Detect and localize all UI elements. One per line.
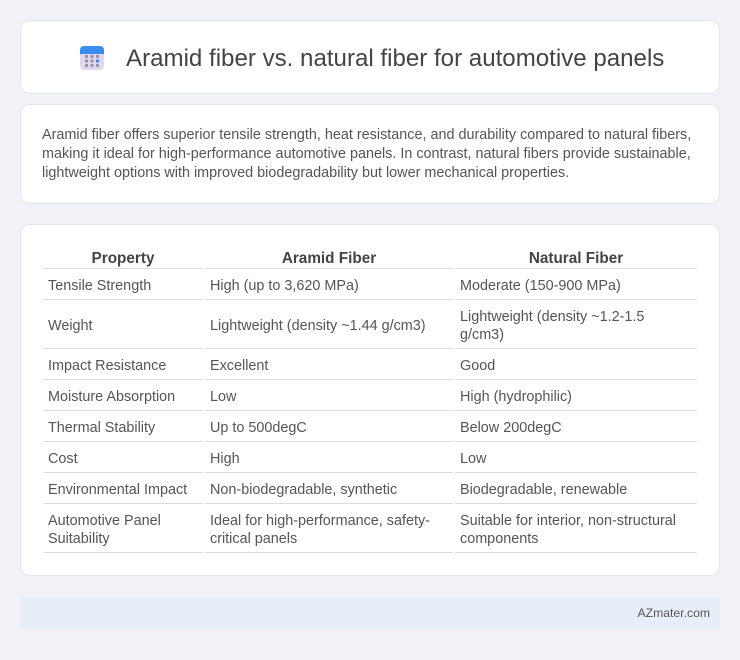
comparison table: components [460, 531, 538, 547]
comparison table: Biodegradable, renewable [460, 482, 627, 498]
footer bar [20, 597, 720, 630]
comparison table: Low [210, 389, 236, 405]
comparison table: Below 200degC [460, 420, 562, 436]
icon: calendar [80, 46, 104, 70]
description text: lightweight options with improved biodegradability but lower mechanical properties. [42, 165, 569, 181]
comparison table: g/cm3) [460, 327, 504, 343]
comparison table: Thermal Stability [48, 420, 155, 436]
comparison table: Aramid Fiber [282, 250, 376, 267]
comparison table: Good [460, 358, 495, 374]
comparison table: Excellent [210, 358, 268, 374]
comparison table: Natural Fiber [529, 250, 623, 267]
comparison table: critical panels [210, 531, 297, 547]
comparison table: Up to 500degC [210, 420, 307, 436]
comparison table: Lightweight (density ~1.2-1.5 [460, 309, 644, 325]
comparison table: Lightweight (density ~1.44 g/cm3) [210, 318, 426, 334]
comparison table: Tensile Strength [48, 278, 151, 294]
title: Aramid fiber vs. natural fiber for automotive panels [126, 45, 664, 72]
comparison table: High (hydrophilic) [460, 389, 572, 405]
comparison table: Moderate (150-900 MPa) [460, 278, 621, 294]
comparison table: High (up to 3,620 MPa) [210, 278, 359, 294]
comparison table: Weight [48, 318, 93, 334]
comparison table: Suitability [48, 531, 110, 547]
comparison table: Moisture Absorption [48, 389, 175, 405]
comparison table: Automotive Panel [48, 513, 161, 529]
description text: making it ideal for high-performance automotive panels. In contrast, natural fibers provide sustainable, [42, 146, 691, 162]
comparison table: High [210, 451, 240, 467]
comparison table card [20, 224, 720, 576]
comparison table: Suitable for interior, non-structural [460, 513, 676, 529]
comparison table: Property [92, 250, 154, 267]
description text [42, 127, 691, 181]
comparison table: Cost [48, 451, 78, 467]
comparison table: Impact Resistance [48, 358, 166, 374]
footer credit: AZmater.com [638, 606, 710, 620]
comparison table: Ideal for high-performance, safety- [210, 513, 430, 529]
comparison table [43, 250, 697, 553]
comparison table: Non-biodegradable, synthetic [210, 482, 397, 498]
comparison table: Environmental Impact [48, 482, 187, 498]
description text: Aramid fiber offers superior tensile strength, heat resistance, and durability compared to natural fibers, [42, 127, 691, 143]
description card [20, 104, 720, 204]
comparison table: Low [460, 451, 486, 467]
header card [20, 20, 720, 94]
